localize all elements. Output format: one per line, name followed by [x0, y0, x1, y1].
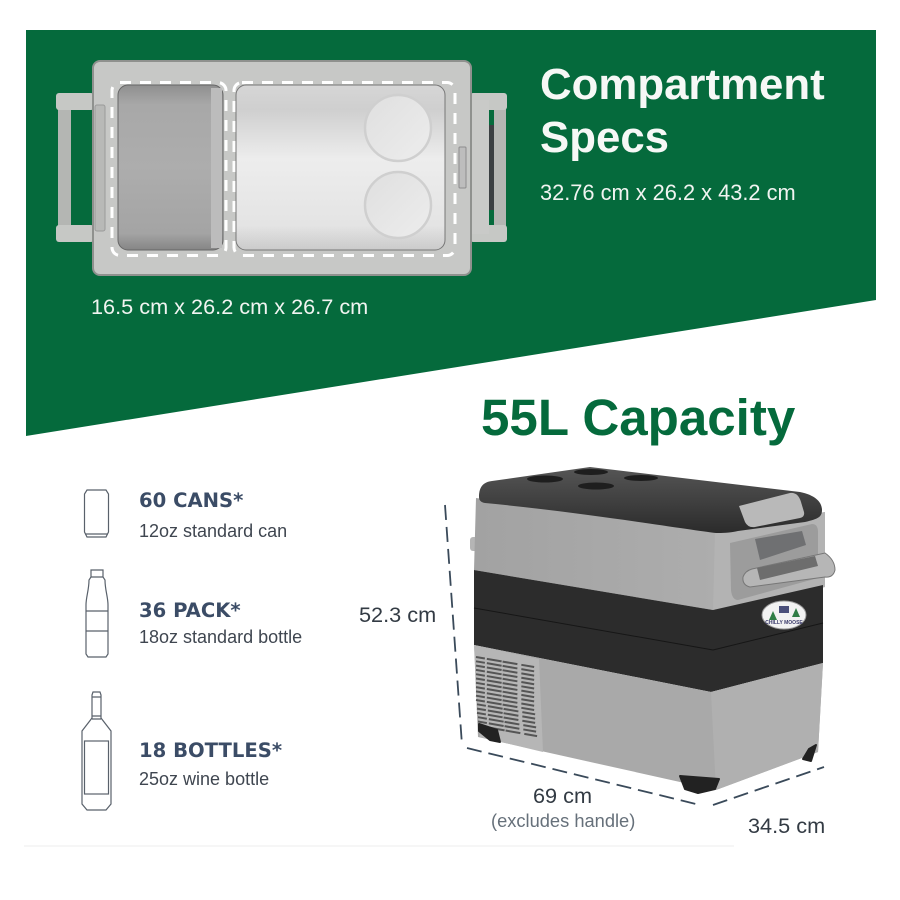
brand badge — [762, 601, 806, 629]
black band — [474, 570, 823, 692]
fridge compartment — [236, 85, 445, 250]
dimensions: left compartment: 16.5 cm x 26.2 cm x 26.7 cm — [91, 294, 368, 319]
label: 60 cans — [139, 489, 287, 541]
heading: compartment specs: Compartment — [540, 60, 825, 109]
dimension line: depth — [713, 767, 824, 805]
label: height: 52.3 cm — [359, 602, 436, 627]
label: 18 bottles — [139, 739, 282, 789]
top view of cooler compartments — [56, 61, 507, 275]
rear handle nub — [470, 537, 478, 551]
upper grey body — [474, 498, 825, 610]
green header panel — [26, 30, 876, 436]
left handle — [56, 93, 94, 242]
label: 18 bottles: 18 BOTTLES* — [139, 739, 282, 762]
label: 36 pack — [139, 599, 302, 647]
latch — [459, 147, 466, 188]
label: length: 69 cm — [533, 783, 592, 808]
brand badge: CHILLY MOOSE — [765, 620, 803, 626]
heading: compartment specs: Specs — [540, 113, 669, 162]
label: 18 bottles: 25oz wine bottle — [139, 769, 269, 789]
lid handle panel — [739, 493, 804, 527]
lower grey body — [474, 645, 823, 790]
lid — [479, 467, 822, 533]
vent grille — [476, 657, 538, 736]
label: 36 pack: 36 PACK* — [139, 599, 241, 622]
label: 60 cans: 12oz standard can — [139, 521, 287, 541]
heading: 55L capacity: 55L Capacity — [481, 389, 796, 446]
side latch — [95, 105, 105, 231]
dimension line: length — [467, 748, 700, 805]
dimension line: height — [445, 505, 462, 745]
compressor panel — [474, 645, 543, 752]
cooler product illustration — [470, 467, 835, 793]
icon: can — [84, 490, 108, 537]
icon: plastic bottle — [86, 570, 108, 657]
control panel and side handle — [730, 524, 835, 600]
dimensions: right compartment: 32.76 cm x 26.2 x 43.2 cm — [540, 180, 796, 205]
freezer compartment — [118, 85, 223, 250]
label: 36 pack: 18oz standard bottle — [139, 627, 302, 647]
dashed outline right — [234, 82, 455, 256]
right handle — [470, 93, 507, 242]
icon: wine bottle — [82, 692, 111, 810]
label: 60 cans: 60 CANS* — [139, 489, 243, 512]
dashed outline left — [112, 82, 226, 256]
heading: compartment specs — [540, 60, 825, 162]
label: depth: 34.5 cm — [748, 813, 825, 838]
cooler body top — [93, 61, 471, 275]
corner bumpers — [479, 724, 816, 793]
cup holders — [527, 469, 658, 490]
note: excludes handle: (excludes handle) — [491, 810, 635, 831]
